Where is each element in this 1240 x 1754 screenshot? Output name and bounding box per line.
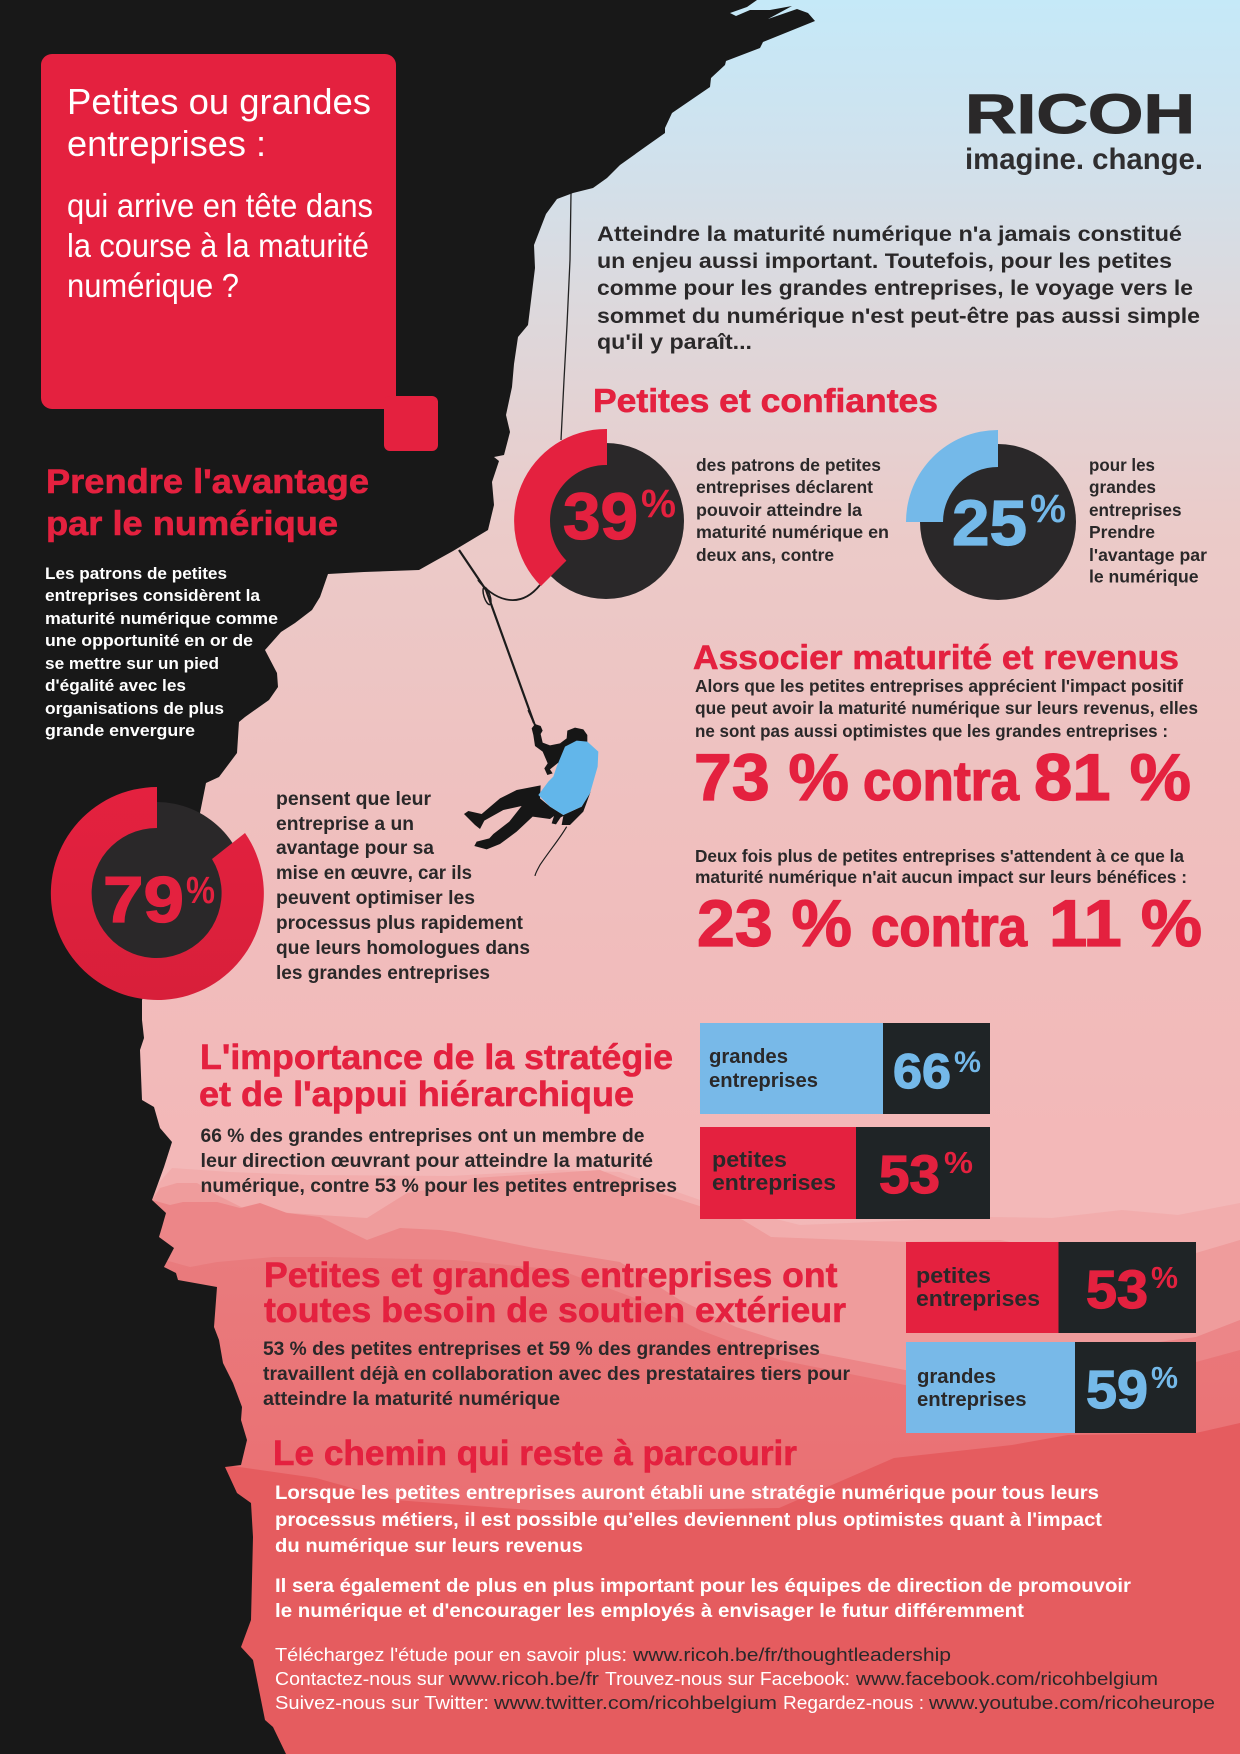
text block: chemin bbox=[275, 1483, 1132, 1622]
upper rope bbox=[561, 193, 571, 440]
text block: 25% caption: pour les bbox=[1089, 455, 1155, 475]
text block: patrons: organisations de plus bbox=[45, 699, 224, 718]
bar: petites entreprises 53% (soutien): petites bbox=[916, 1263, 991, 1288]
bar: petites entreprises 53% (soutien): 53 bbox=[1086, 1260, 1148, 1320]
climbing rope and carabiner bbox=[459, 550, 540, 723]
intro paragraph bbox=[597, 223, 1200, 354]
bar: petites entreprises 53%: 53 bbox=[879, 1145, 940, 1205]
donut chart: 79%: % bbox=[186, 870, 215, 912]
stat: 73 % contra 81 %: 73 % bbox=[694, 740, 849, 814]
bar: petites entreprises 53%: petites bbox=[712, 1147, 787, 1172]
title text: qui arrive en tête dans bbox=[67, 187, 373, 224]
stat: 23 % contra 11 % bbox=[697, 886, 1202, 960]
text block: stratégie: numérique, contre 53 % pour les petites entreprises bbox=[200, 1176, 677, 1197]
footer links bbox=[275, 1644, 1215, 1713]
text block: revenus: que peut avoir la maturité numérique sur leurs revenus, elles bbox=[695, 698, 1198, 718]
title text: entreprises : bbox=[67, 123, 266, 164]
text block: 39% caption: deux ans, contre bbox=[696, 545, 834, 565]
text block: pensent: pensent que leur bbox=[276, 789, 432, 810]
donut chart: 39%: % bbox=[641, 482, 676, 526]
text block: patrons: entreprises considèrent la bbox=[45, 586, 261, 605]
text block: revenus bbox=[695, 676, 1198, 741]
text block: bénéfices: Deux fois plus de petites entreprises s'attendent à ce que la bbox=[695, 846, 1184, 866]
text block: pensent bbox=[276, 789, 530, 984]
bar: grandes entreprises 59%: % bbox=[1151, 1360, 1178, 1395]
text block: patrons: d'égalité avec les bbox=[45, 676, 186, 695]
text block: 39% caption bbox=[696, 455, 889, 565]
stat: 73 % contra 81 %: 81 % bbox=[1034, 740, 1191, 814]
bar: petites entreprises 53%: % bbox=[944, 1145, 973, 1180]
text block: patrons: Les patrons de petites bbox=[45, 564, 227, 583]
text block: revenus: Alors que les petites entreprises apprécient l'impact positif bbox=[695, 676, 1183, 696]
text block: patrons: maturité numérique comme bbox=[45, 609, 278, 628]
donut chart: 25%: 25 bbox=[952, 487, 1027, 559]
stat: 73 % contra 81 % bbox=[694, 740, 1191, 814]
heading: Le chemin qui reste à parcourir: Le chemin qui reste à parcourir bbox=[273, 1434, 797, 1473]
text block: chemin: processus métiers, il est possible qu’elles deviennent plus optimistes quant à l'impact bbox=[275, 1510, 1103, 1531]
text block: pensent: que leurs homologues dans bbox=[276, 938, 530, 959]
heading: Petites et grandes entreprises bbox=[264, 1256, 846, 1330]
footer links: Regardez-nous : bbox=[783, 1692, 924, 1713]
stat: 23 % contra 11 %: 23 % bbox=[697, 886, 852, 960]
text block: bénéfices: maturité numérique n'ait aucun impact sur leurs bénéfices : bbox=[695, 867, 1187, 887]
donut chart: 25% bbox=[906, 430, 1076, 600]
text block: soutien extérieur: atteindre la maturité numérique bbox=[263, 1389, 560, 1410]
title panel bbox=[41, 54, 438, 451]
text block: pensent: processus plus rapidement bbox=[276, 913, 524, 934]
text block: stratégie: 66 % des grandes entreprises ont un membre de bbox=[200, 1126, 644, 1147]
donut chart: 25%: % bbox=[1030, 487, 1066, 531]
text block: revenus: ne sont pas aussi optimistes que les grandes entreprises : bbox=[695, 721, 1168, 741]
heading: Associer maturité et revenus: Associer maturité et revenus bbox=[693, 639, 1179, 677]
logo: Ricoh: imagine. change. bbox=[965, 143, 1203, 176]
text block: chemin: du numérique sur leurs revenus bbox=[275, 1536, 583, 1557]
bar: petites entreprises 53%: entreprises bbox=[712, 1170, 836, 1195]
logo: Ricoh bbox=[965, 82, 1203, 176]
title text bbox=[67, 81, 373, 304]
donut chart: 39% bbox=[514, 429, 684, 599]
text block: patrons: grande envergure bbox=[45, 721, 195, 740]
footer links: www.youtube.com/ricoheurope bbox=[928, 1692, 1215, 1713]
text block: 25% caption: le numérique bbox=[1089, 566, 1199, 586]
heading: Petites et confiantes: Petites et confiantes bbox=[593, 382, 938, 419]
bar: grandes entreprises 59%: grandes bbox=[917, 1366, 996, 1388]
text block: 39% caption: entreprises déclarent bbox=[696, 477, 873, 497]
bar: petites entreprises 53% bbox=[700, 1127, 990, 1219]
footer links: Suivez-nous sur Twitter: bbox=[275, 1692, 489, 1713]
bar: grandes entreprises 66%: grandes bbox=[709, 1046, 788, 1068]
text block: soutien extérieur: 53 % des petites entreprises et 59 % des grandes entreprises bbox=[263, 1339, 820, 1360]
text block: soutien extérieur: travaillent déjà en collaboration avec des prestataires tiers pour bbox=[263, 1364, 851, 1385]
text block: 25% caption: Prendre bbox=[1089, 522, 1155, 542]
text block: pensent: les grandes entreprises bbox=[276, 963, 490, 984]
bar: grandes entreprises 66%: entreprises bbox=[709, 1070, 818, 1092]
footer links: www.facebook.com/ricohbelgium bbox=[855, 1668, 1158, 1689]
bar: grandes entreprises 59%: 59 bbox=[1086, 1360, 1148, 1420]
heading: Prendre l'avantage: par le numérique bbox=[46, 505, 338, 543]
bar: petites entreprises 53% (soutien): % bbox=[1151, 1260, 1178, 1295]
donut chart: 79%: 79 bbox=[103, 863, 184, 936]
text block: chemin: le numérique et d'encourager les employés à envisager le futur différemment bbox=[275, 1601, 1025, 1622]
intro paragraph: Atteindre la maturité numérique n'a jamais constitué bbox=[597, 223, 1182, 246]
stat: 73 % contra 81 %: contra bbox=[863, 749, 1020, 812]
text block: stratégie: leur direction œuvrant pour atteindre la maturité bbox=[200, 1151, 653, 1172]
logo: Ricoh: RICOH bbox=[965, 82, 1195, 145]
bar: petites entreprises 53% (soutien) bbox=[906, 1242, 1196, 1333]
bar: grandes entreprises 66%: % bbox=[954, 1046, 981, 1079]
donut chart: 39%: 39 bbox=[563, 479, 638, 553]
icon: climber bbox=[464, 710, 598, 876]
footer links: Trouvez-nous sur Facebook: bbox=[605, 1668, 850, 1689]
text block: 39% caption: pouvoir atteindre la bbox=[696, 500, 862, 520]
intro paragraph: comme pour les grandes entreprises, le voyage vers le bbox=[597, 277, 1193, 300]
mountain layers bbox=[150, 1168, 1240, 1754]
text block: soutien extérieur bbox=[263, 1339, 851, 1410]
footer links: Contactez-nous sur bbox=[275, 1668, 444, 1689]
stat: 23 % contra 11 %: 11 % bbox=[1049, 886, 1202, 960]
text block: 25% caption: entreprises bbox=[1089, 500, 1182, 520]
bar: petites entreprises 53% (soutien): entreprises bbox=[916, 1286, 1040, 1311]
bar: grandes entreprises 59% bbox=[906, 1342, 1196, 1433]
cliff silhouette bbox=[0, 0, 815, 1754]
footer links: www.twitter.com/ricohbelgium bbox=[493, 1692, 777, 1713]
text block: 25% caption: l'avantage par bbox=[1089, 545, 1207, 565]
text block: 25% caption bbox=[1089, 455, 1207, 586]
text block: bénéfices bbox=[695, 846, 1187, 887]
intro paragraph: sommet du numérique n'est peut-être pas aussi simple bbox=[597, 305, 1200, 328]
intro paragraph: un enjeu aussi important. Toutefois, pour les petites bbox=[597, 250, 1172, 273]
text block: pensent: peuvent optimiser les bbox=[276, 888, 475, 909]
heading: Petites et grandes entreprises: toutes besoin de soutien extérieur bbox=[264, 1291, 846, 1330]
text block: pensent: avantage pour sa bbox=[276, 838, 434, 859]
text block: 39% caption: des patrons de petites bbox=[696, 455, 881, 475]
text block: stratégie bbox=[200, 1126, 677, 1197]
heading: Petites et grandes entreprises: Petites et grandes entreprises ont bbox=[264, 1256, 838, 1295]
text block: patrons: se mettre sur un pied bbox=[45, 654, 219, 673]
bar: grandes entreprises 66% bbox=[700, 1023, 990, 1114]
footer links: Téléchargez l'étude pour en savoir plus: bbox=[275, 1644, 627, 1665]
bar: grandes entreprises 66%: 66 bbox=[893, 1045, 951, 1099]
text block: pensent: entreprise a un bbox=[276, 814, 414, 835]
donut chart: 79% bbox=[51, 787, 264, 1000]
heading: Prendre l'avantage bbox=[46, 463, 369, 543]
footer links: www.ricoh.be/fr/thoughtleadership bbox=[632, 1644, 951, 1665]
text block: patrons bbox=[45, 564, 278, 740]
heading: L'importance de la stratégie: et de l'appui hiérarchique bbox=[199, 1075, 634, 1114]
footer links: www.ricoh.be/fr bbox=[448, 1668, 599, 1689]
bar: grandes entreprises 59%: entreprises bbox=[917, 1389, 1026, 1411]
text block: patrons: une opportunité en or de bbox=[45, 631, 253, 650]
heading: Prendre l'avantage: Prendre l'avantage bbox=[46, 463, 369, 501]
heading: L'importance de la stratégie: L'importance de la stratégie bbox=[200, 1038, 673, 1077]
text block: chemin: Il sera également de plus en plus important pour les équipes de direction de promouvoir bbox=[275, 1576, 1132, 1597]
stat: 23 % contra 11 %: contra bbox=[871, 895, 1028, 958]
title text: numérique ? bbox=[67, 267, 239, 304]
title text: Petites ou grandes bbox=[67, 81, 371, 122]
text block: pensent: mise en œuvre, car ils bbox=[276, 863, 472, 884]
heading: L'importance de la stratégie bbox=[199, 1038, 673, 1114]
text block: 25% caption: grandes bbox=[1089, 477, 1156, 497]
text block: chemin: Lorsque les petites entreprises auront établi une stratégie numérique pour tous leurs bbox=[275, 1483, 1099, 1504]
text block: 39% caption: maturité numérique en bbox=[696, 522, 889, 542]
title text: la course à la maturité bbox=[67, 227, 369, 264]
intro paragraph: qu'il y paraît... bbox=[597, 331, 752, 354]
